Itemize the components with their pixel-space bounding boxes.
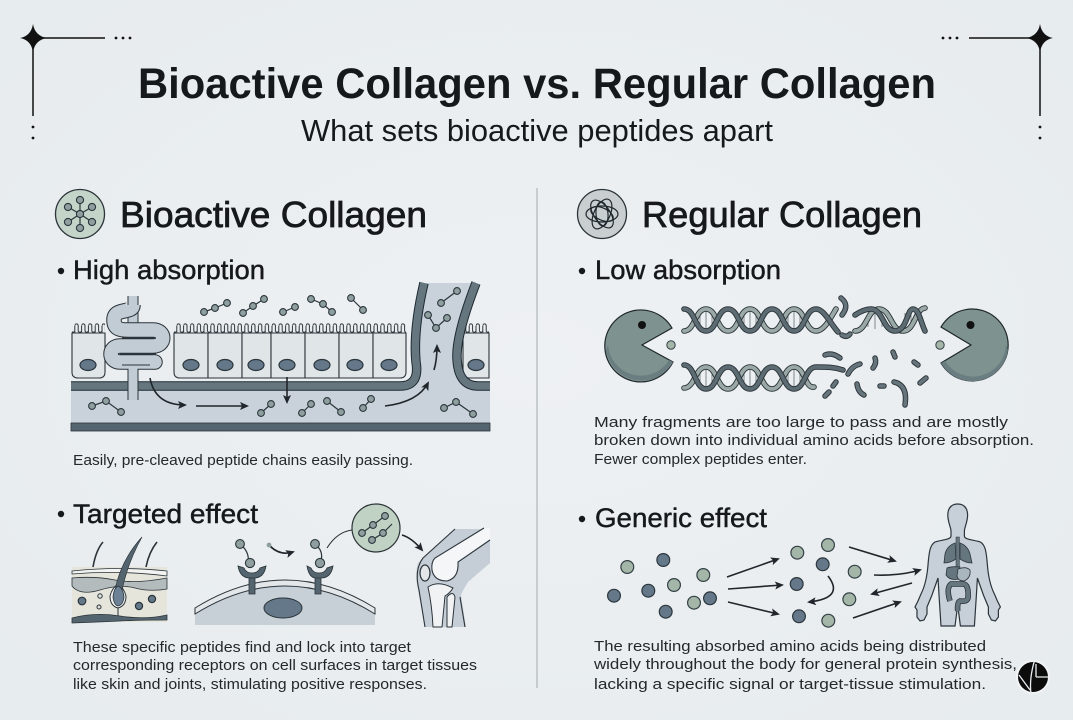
icon: regular collagen atom [578, 190, 626, 238]
arrow: bubble to knee [402, 535, 422, 550]
panel: bioactive collagen [56, 190, 490, 693]
illustration: cell with receptors [195, 530, 375, 625]
illustration: broken fragments [825, 298, 926, 405]
caption: low absorption: Fewer complex peptides enter. [594, 451, 807, 468]
panel: regular collagen [578, 190, 1034, 693]
icon: left enzyme pacman [605, 310, 675, 382]
subtitle: What sets bioactive peptides apart [301, 113, 773, 148]
caption: targeted effect: like skin and joints, stimulating positive responses. [73, 676, 427, 693]
corner ornament: top left [20, 24, 131, 139]
basement membrane and vessel walls [71, 283, 490, 431]
blood vessel interior [71, 283, 490, 425]
illustration: skin cross-section [72, 537, 167, 623]
caption: low absorption [594, 414, 1034, 468]
caption: generic effect: The resulting absorbed amino acids being distributed [594, 638, 986, 655]
center divider [536, 188, 538, 688]
illustration: knee joint [416, 528, 490, 627]
caption: targeted effect: These specific peptides find and lock into target [73, 639, 412, 656]
caption: low absorption: broken down into individual amino acids before absorption. [594, 432, 1034, 449]
peptide chains [89, 288, 476, 417]
icon: peptide bubble [352, 504, 400, 552]
diagram: intestinal absorption [71, 283, 490, 431]
small intestine coil [111, 296, 163, 400]
bullet heading: generic effect: Generic effect [595, 503, 768, 533]
icon: bioactive molecule network [56, 190, 104, 238]
logo mark [1016, 659, 1050, 694]
caption: targeted effect [73, 639, 477, 693]
epithelial cells [72, 323, 489, 378]
caption: generic effect: widely throughout the body for general protein synthesis, [593, 656, 1017, 673]
illustration: collagen helices [684, 308, 925, 389]
heading: regular collagen: Regular Collagen [642, 194, 922, 235]
bullet heading: high absorption: High absorption [73, 255, 265, 285]
flow arrows [150, 346, 437, 406]
caption: low absorption: Many fragments are too large to pass and are mostly [594, 414, 1008, 431]
distribution arrows [727, 547, 920, 618]
caption: generic effect: lacking a specific signal or target-tissue stimulation. [594, 676, 986, 693]
caption: targeted effect: corresponding receptors on cell surfaces in target tissues [73, 657, 477, 674]
caption: generic effect [593, 638, 1017, 693]
icon: right enzyme pacman [936, 309, 1008, 381]
heading: bioactive collagen: Bioactive Collagen [120, 194, 427, 235]
illustration: human body with organs [915, 504, 1000, 626]
corner ornament: top right [942, 24, 1053, 139]
bullet heading: low absorption: Low absorption [595, 255, 781, 285]
bullet heading: targeted effect: Targeted effect [73, 499, 259, 529]
title: Bioactive Collagen vs. Regular Collagen [138, 60, 936, 108]
amino acid dots [608, 539, 861, 627]
caption: high absorption: Easily, pre-cleaved peptide chains easily passing. [73, 452, 413, 469]
